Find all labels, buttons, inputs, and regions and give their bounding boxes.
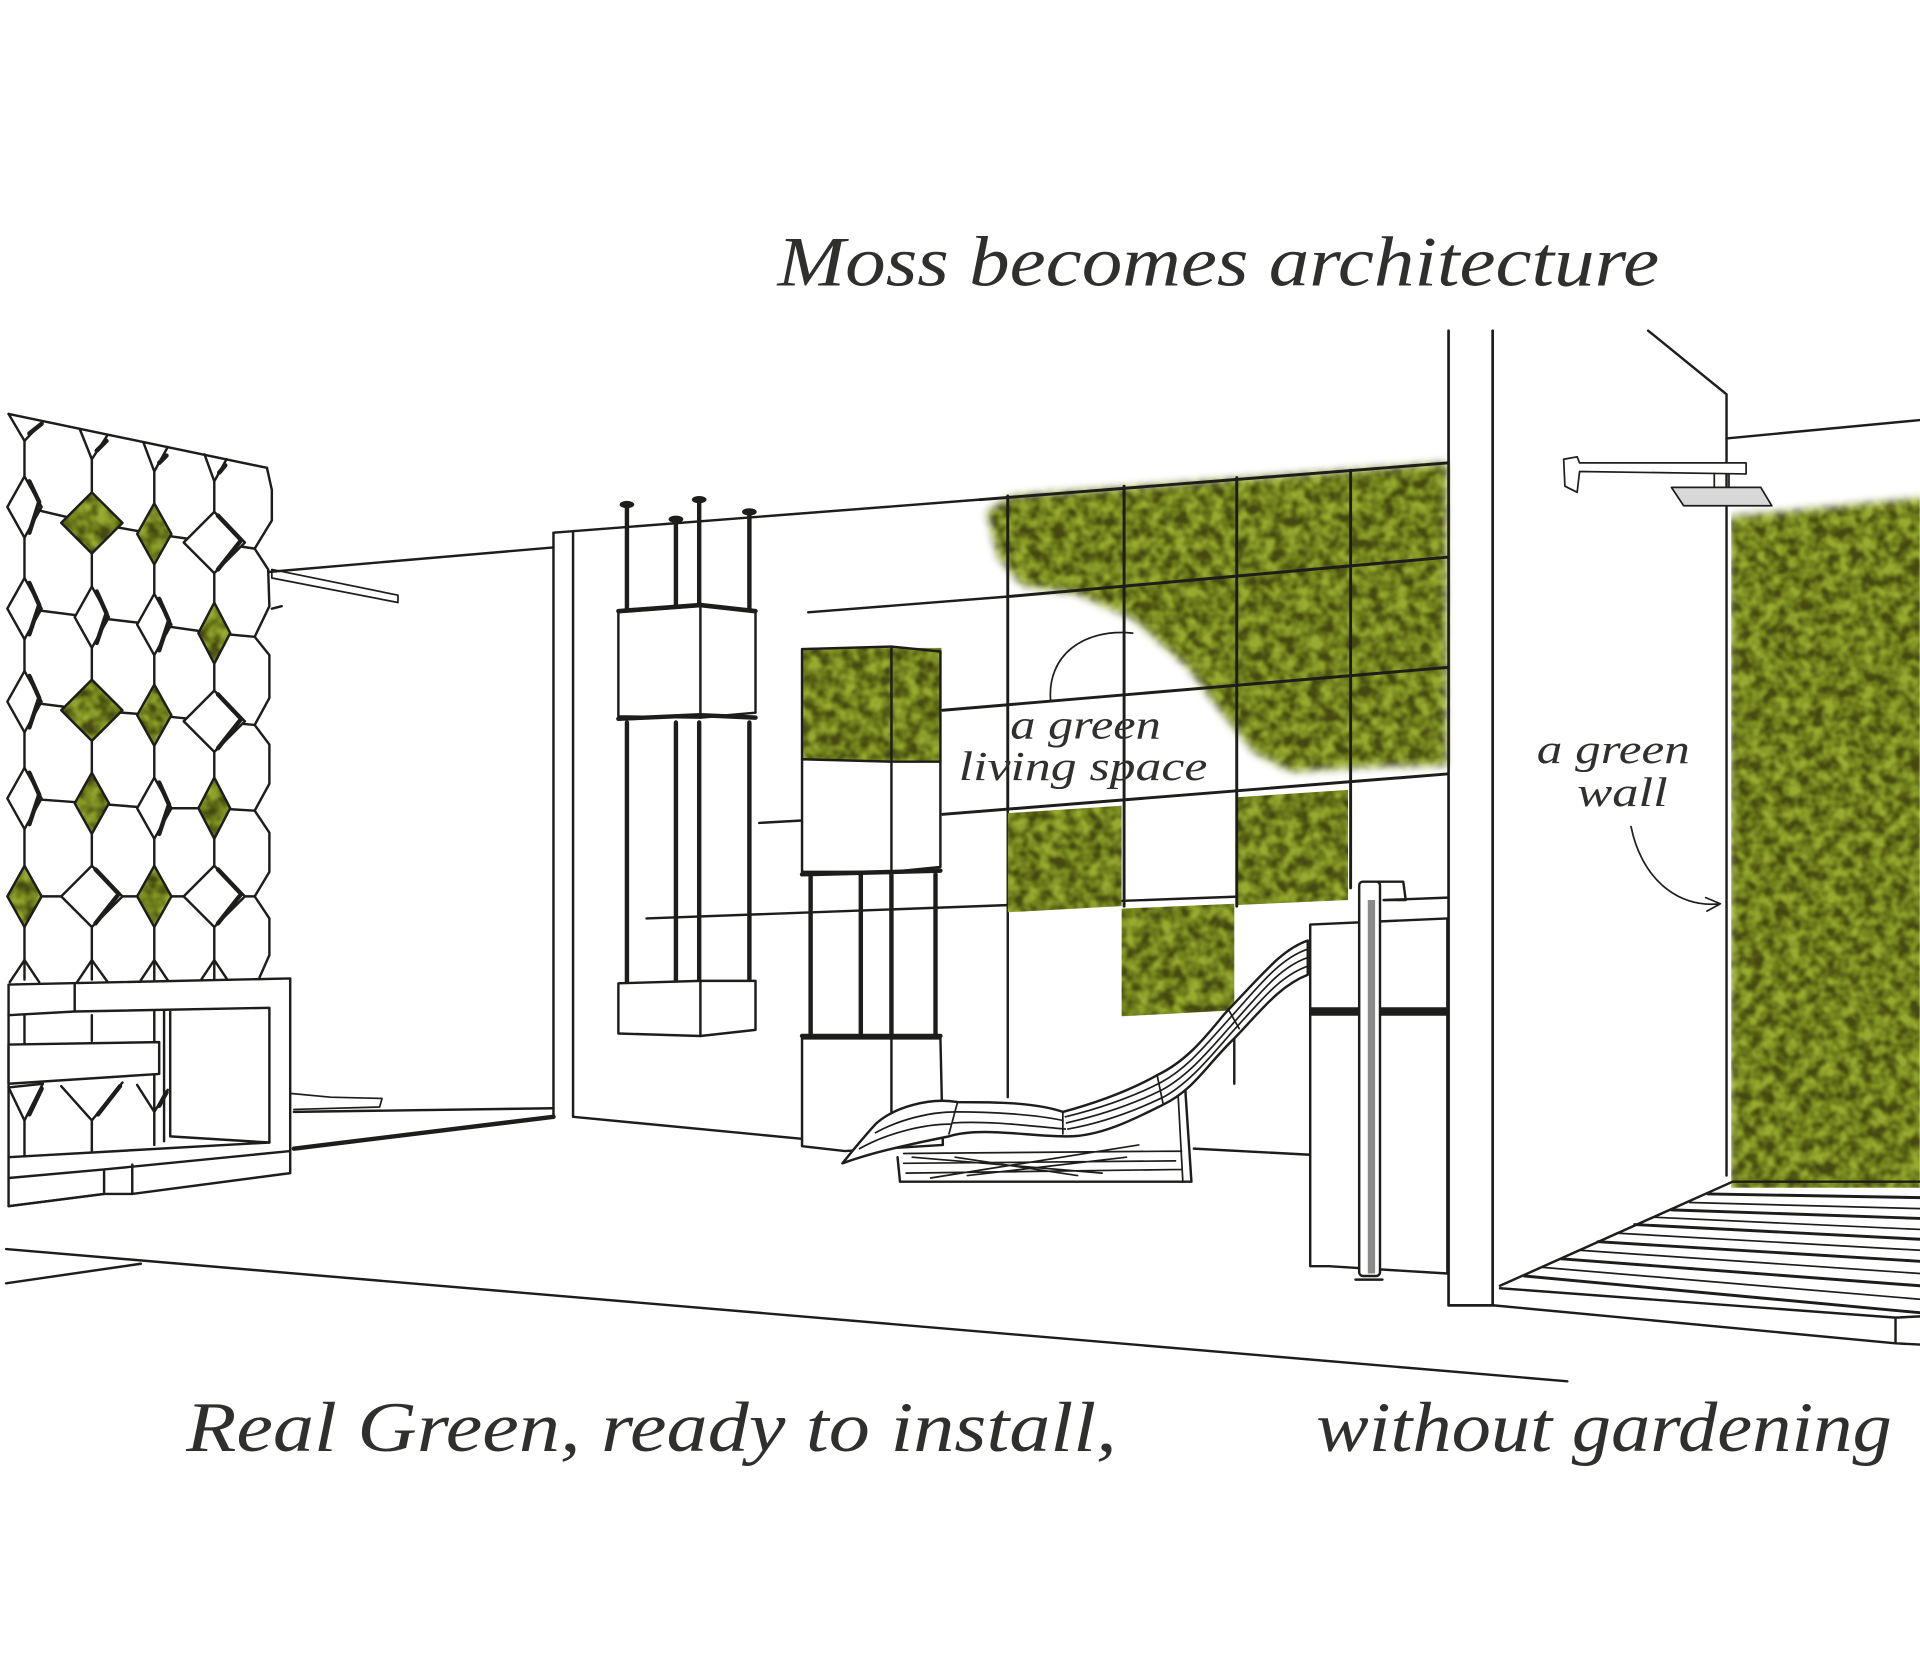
column B: moss topped column bbox=[802, 647, 943, 1151]
panel: low concrete bench bbox=[9, 978, 290, 1206]
rods bbox=[627, 500, 749, 982]
back wall lines bbox=[553, 500, 1310, 1155]
callout: a green wall bbox=[1537, 727, 1720, 911]
main pillar bbox=[1449, 331, 1494, 1305]
callout: a green living space: a green bbox=[1010, 702, 1161, 748]
moss panels: checker squares bbox=[1008, 790, 1348, 1016]
moss panel: large soft green living space bbox=[961, 447, 1451, 784]
chair cushions bbox=[842, 940, 1308, 1163]
title: Moss becomes architecture bbox=[776, 223, 1659, 301]
column A: empty planter column bbox=[618, 496, 757, 1036]
callout: a green living space: living space bbox=[959, 744, 1207, 790]
rod caps bbox=[620, 496, 757, 523]
faucet stem bbox=[1359, 882, 1380, 1276]
callout: a green wall: wall bbox=[1577, 770, 1668, 816]
moss panel: green wall bbox=[1731, 490, 1920, 1188]
boxes bbox=[618, 605, 756, 1036]
lounge chair bbox=[842, 940, 1308, 1182]
slatted floor bbox=[1494, 1182, 1920, 1345]
foreground floor lines bbox=[6, 1249, 1567, 1381]
panel: lattice moss wall bbox=[6, 412, 274, 984]
moss lattice diamonds bbox=[8, 494, 229, 924]
diamond outlines bbox=[7, 481, 241, 927]
illustration: moss architecture interior sketch bbox=[4, 236, 1920, 1466]
caption: without gardening: without gardening bbox=[1316, 1389, 1892, 1467]
back room lines at left bbox=[269, 547, 553, 1149]
wall grid lines over moss bbox=[943, 463, 1447, 906]
icon: shower head bbox=[1564, 457, 1772, 506]
shower room wall edges bbox=[1648, 331, 1920, 1176]
lattice frame lines bbox=[9, 414, 272, 1145]
chair stripes bbox=[860, 949, 1308, 1149]
empty lattice diamonds bbox=[7, 476, 245, 927]
arrow to green wall bbox=[1631, 827, 1720, 911]
callout: a green living space bbox=[959, 633, 1207, 790]
moss top bbox=[802, 648, 942, 763]
chair frame bbox=[898, 1090, 1191, 1182]
caption: real green: Real Green, ready to install, bbox=[185, 1389, 1117, 1467]
cabinet with faucet bbox=[1310, 882, 1447, 1280]
callout: a green wall: a green bbox=[1537, 727, 1690, 773]
